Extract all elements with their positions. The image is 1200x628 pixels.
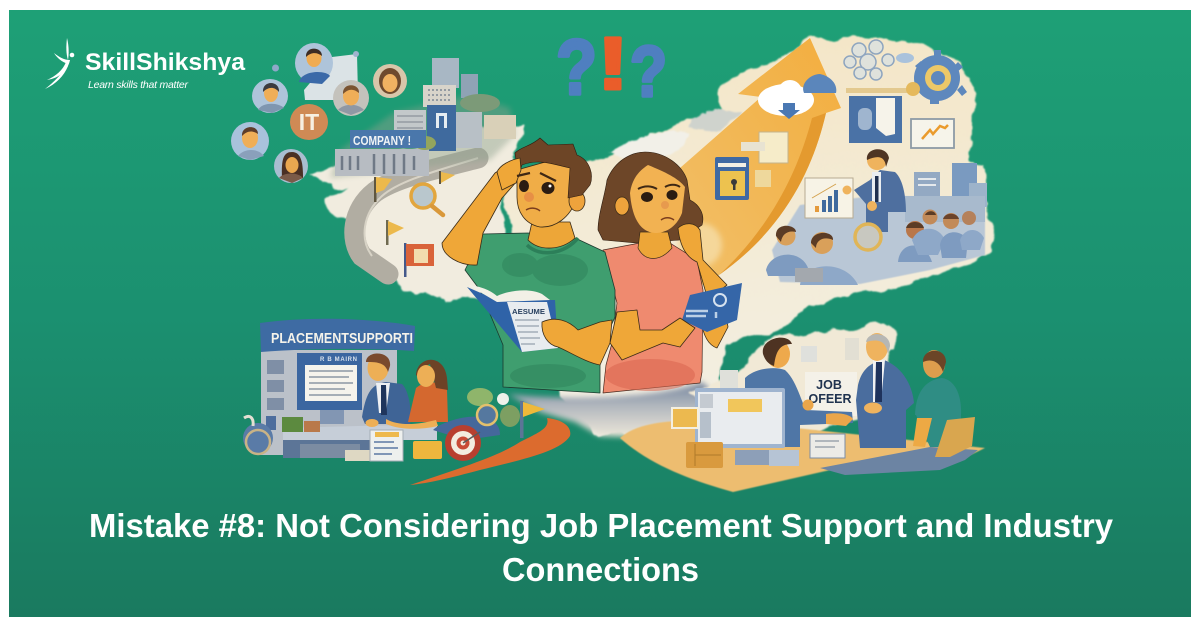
key pipe: [846, 82, 920, 96]
face: [630, 165, 685, 233]
nose and mouth: [661, 201, 674, 220]
avatar 5: [231, 122, 269, 160]
icon: figure mark: [45, 38, 74, 89]
nose and mouth: [524, 192, 540, 211]
job offer sign: JOB: [816, 378, 842, 392]
cloud below figures: [508, 382, 722, 438]
resume book: AESUME: [512, 307, 545, 316]
collar: [527, 238, 578, 253]
panel: career skills icons: [715, 40, 967, 200]
ear: [615, 197, 629, 215]
ear: [569, 191, 585, 211]
panel: placement support scene: [243, 319, 722, 485]
panel: network of people: [231, 43, 407, 183]
raised hand and arm: [678, 224, 727, 300]
exclamation mark: !: [597, 22, 629, 105]
hair: [515, 138, 591, 198]
desk: [620, 420, 985, 492]
resume book: [467, 285, 558, 352]
banner: [260, 319, 415, 352]
hand on head: [497, 158, 521, 190]
avatar 2: [252, 79, 288, 113]
title: Connections: [502, 551, 699, 588]
collar and neck: [638, 232, 672, 258]
job offer sign: [805, 372, 857, 416]
icon: yellow flag 2: [439, 171, 455, 184]
teal shirt colleague: [913, 350, 961, 447]
tagline: Learn skills that matter: [88, 79, 188, 91]
job offer sign: OFEER: [808, 392, 852, 406]
question marks and exclamation: [556, 22, 667, 112]
background papers: [720, 338, 859, 388]
target: [445, 425, 481, 461]
monitor: R B MAIRN: [320, 357, 357, 363]
eyes: [517, 173, 556, 194]
cloud behind handshake: [690, 327, 899, 440]
monitor: [695, 388, 799, 466]
icon: magnifying glass: [411, 184, 443, 215]
icon: white cloud: [758, 80, 814, 119]
face: [517, 155, 577, 227]
icon: molecule outlines: [844, 40, 894, 80]
shirt: [465, 233, 615, 393]
presenter: [842, 149, 906, 232]
question mark left: ?: [556, 23, 597, 111]
icon: blue cloud: [803, 74, 836, 93]
woman at desk: [386, 360, 448, 429]
whiteboard chart: [805, 178, 853, 218]
banner: PLACEMENTSUPPORTI: [271, 331, 413, 347]
avatar 3: [333, 80, 369, 116]
senior employer: [856, 333, 914, 448]
desk: [283, 424, 437, 461]
name plate: [810, 434, 845, 458]
office buildings: [905, 163, 987, 222]
avatar 1: [295, 43, 333, 84]
chair: [935, 417, 975, 457]
sofa and plants: [433, 388, 520, 440]
monitor: [297, 353, 362, 424]
paper document: [370, 430, 403, 461]
shirt shade: [502, 253, 588, 388]
raised arm: [442, 158, 518, 265]
avatar 4: [373, 64, 407, 98]
panel: presentation scene: [766, 149, 987, 285]
document cards: [741, 132, 788, 187]
man at desk: [362, 353, 411, 427]
small pill: [896, 53, 914, 63]
shirt shade: [605, 359, 695, 391]
back hair: [598, 152, 703, 243]
growth arrow: [672, 38, 841, 292]
cream cloud: left road area: [308, 125, 523, 300]
orange curved arrow: [410, 418, 570, 485]
question mark right: ?: [630, 33, 667, 112]
panel: company buildings: [330, 58, 516, 178]
recruiter facing away: [745, 338, 853, 447]
desk grey side: [820, 447, 978, 475]
cream cloud: central and right: [505, 37, 992, 438]
icon: gear: [914, 50, 967, 104]
robot panel: [849, 96, 902, 143]
note paper: [304, 54, 358, 100]
illustration: girl with tablet: [598, 152, 742, 393]
lower arm elbow: [701, 310, 728, 348]
forearm and hand: [610, 310, 695, 360]
eyes: [638, 185, 680, 202]
tablet: [682, 283, 742, 332]
title: [89, 507, 1114, 588]
building: [261, 350, 397, 455]
yellow card: [672, 408, 698, 428]
audience: [766, 210, 984, 285]
icon: yellow flag 1: [374, 177, 392, 202]
logo: [45, 38, 246, 91]
neck: [528, 222, 575, 248]
illustration: boy holding resume: [442, 138, 615, 393]
connector dots: [272, 51, 359, 72]
road and flags: [355, 158, 478, 277]
IT badge: IT: [299, 109, 319, 135]
IT badge: [290, 104, 328, 140]
icon: yellow flag 3: [386, 220, 404, 245]
shirt: [603, 243, 703, 393]
forearm and hand: [542, 319, 612, 365]
ring prop: [243, 416, 273, 454]
icon: red flag: [404, 243, 434, 277]
orange folder: [686, 442, 723, 468]
avatar 6: [274, 149, 308, 183]
brand name: SkillShikshya: [85, 49, 246, 76]
line chart card: [911, 119, 954, 148]
building windows: [266, 360, 284, 430]
panel: job offer scene: [620, 327, 985, 492]
boxes: [282, 417, 320, 432]
flag: [520, 401, 545, 438]
padlock card: [715, 157, 749, 200]
title: Mistake #8: Not Considering Job Placement Support and Industry: [89, 507, 1114, 544]
company sign: COMPANY !: [353, 134, 411, 148]
yellow box: [413, 441, 442, 459]
